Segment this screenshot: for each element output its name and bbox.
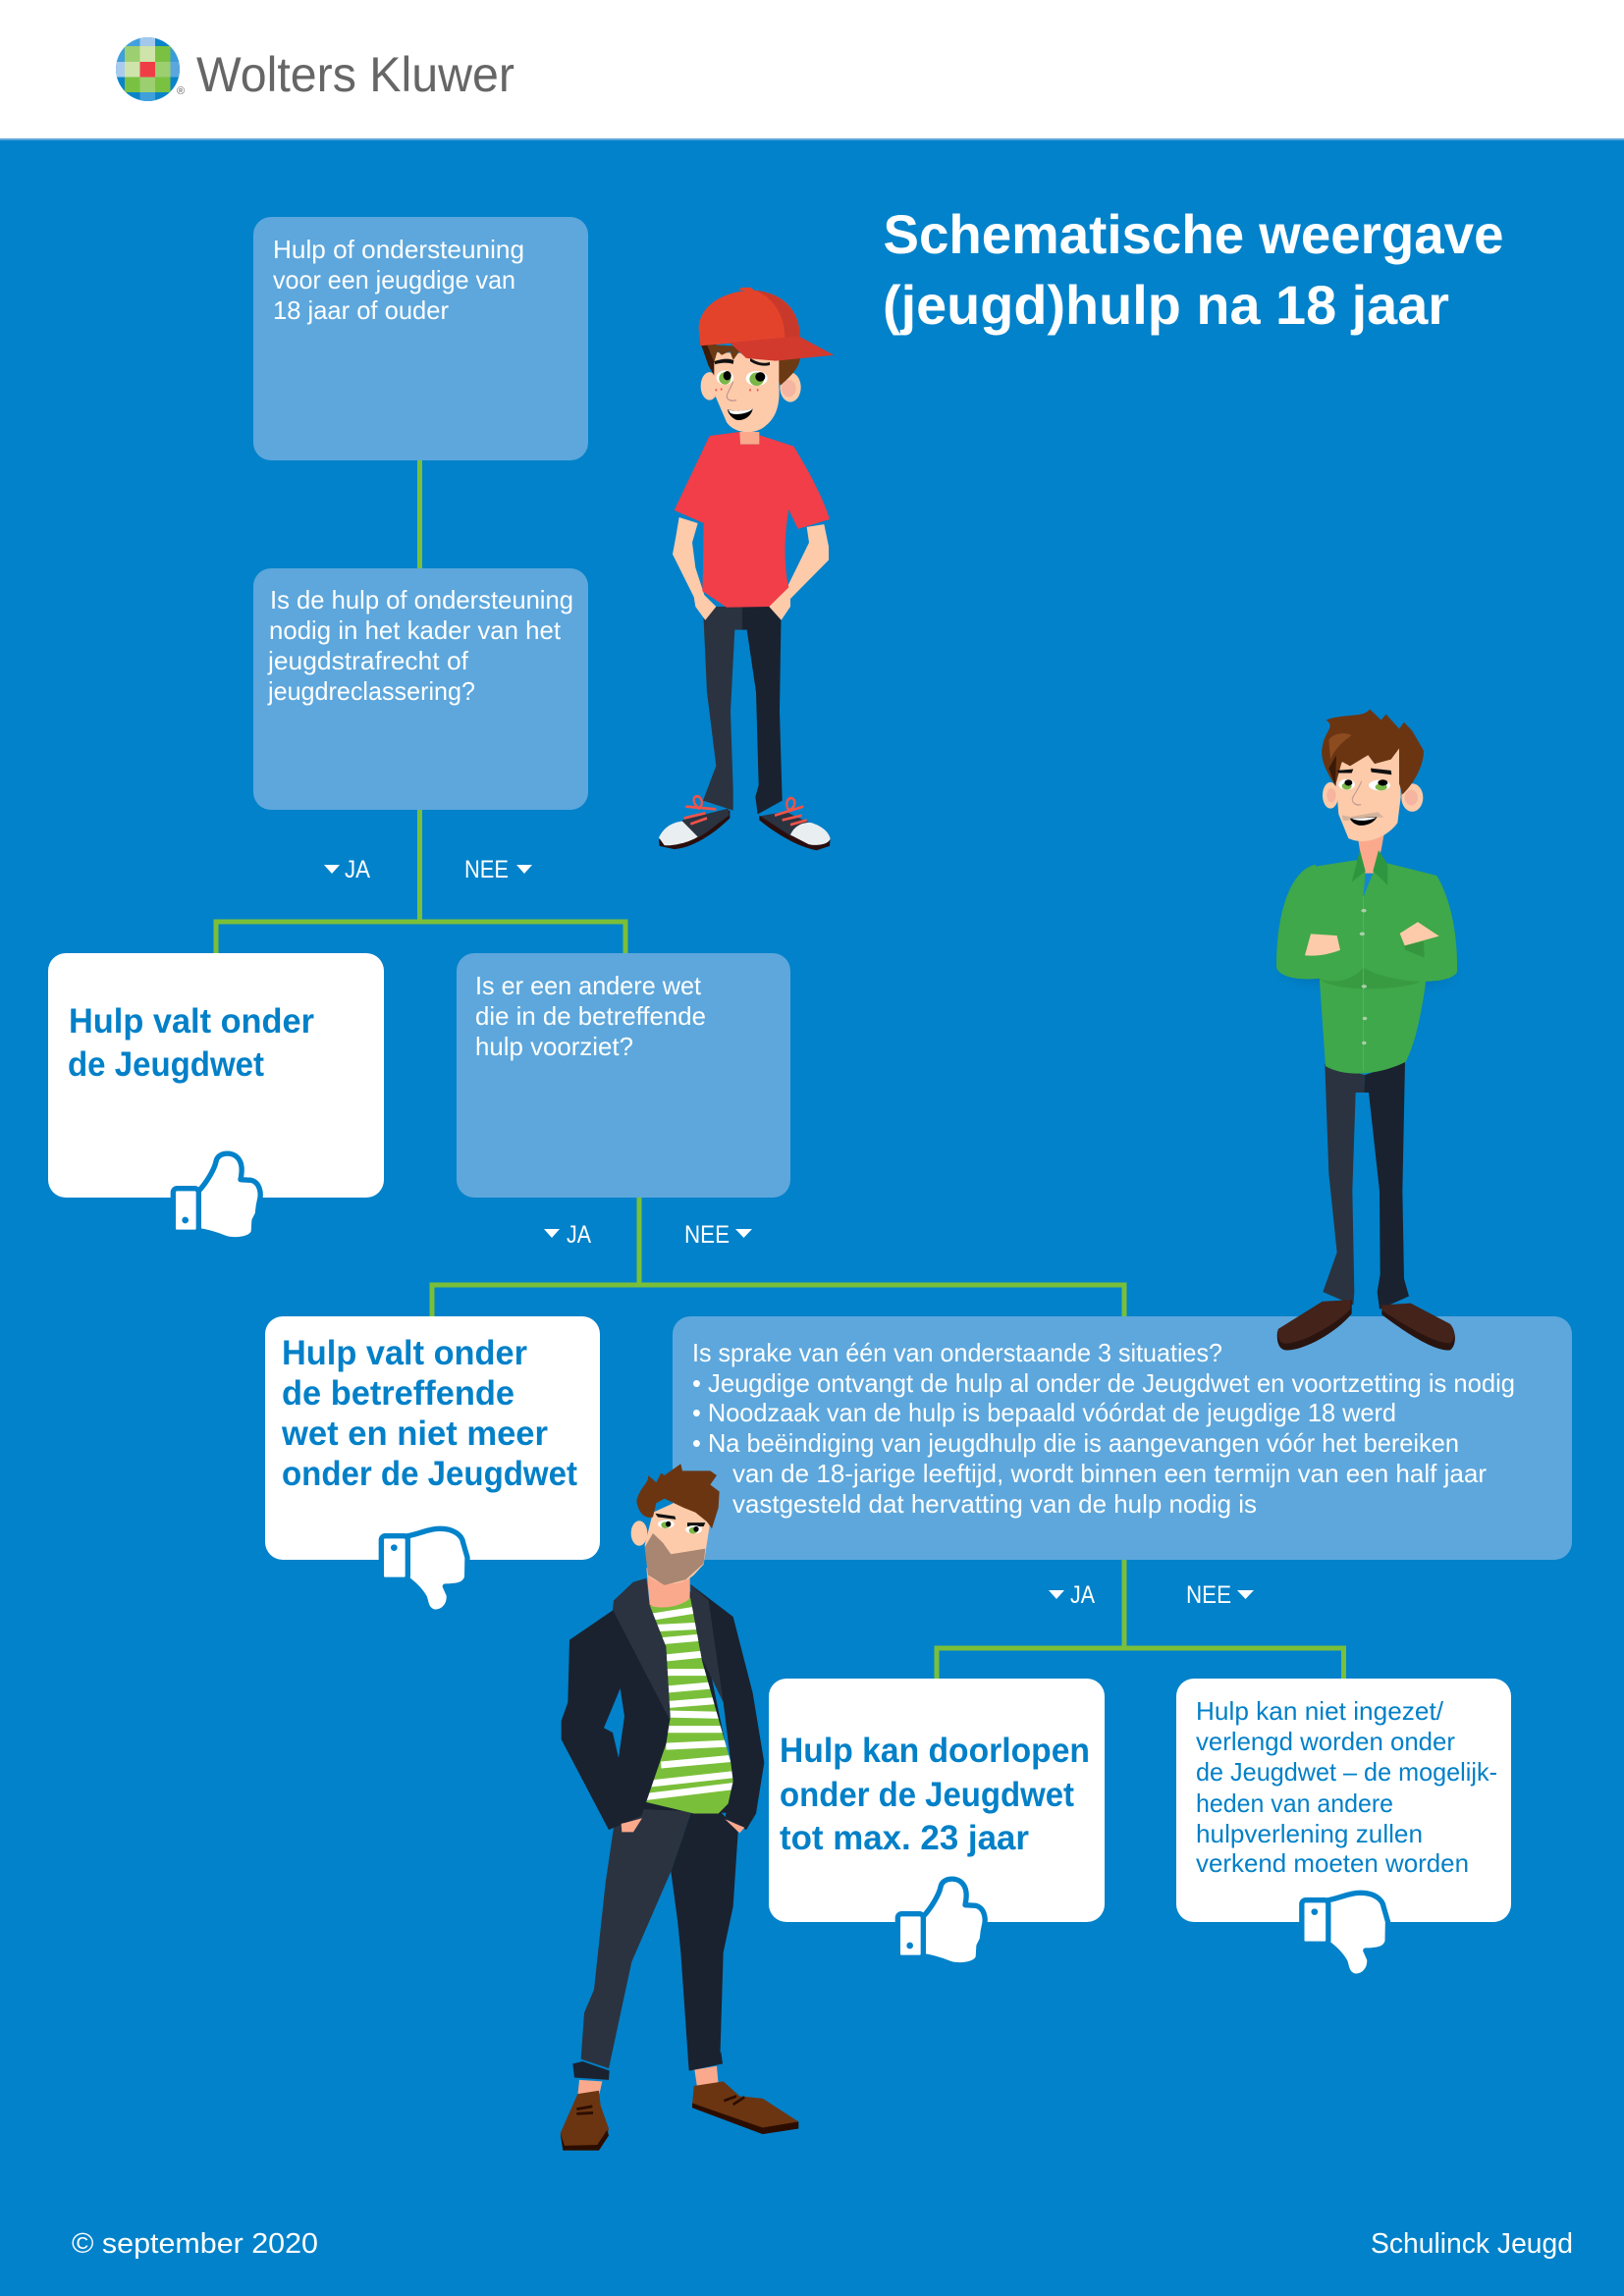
figure: bearded man with jacket [561,1464,798,2151]
panel: hulp kan niet ingezet: hulpverlening zullen [1196,1819,1423,1848]
panel: drie situaties question: • Na beëindiging van jeugdhulp die is aangevangen vóór het bereiken [692,1428,1459,1458]
icon: thumb down [1302,1893,1387,1976]
label: ja / nee 2: JA [567,1221,591,1249]
figure: boy with red cap [659,288,834,850]
figure: man with green shirt [1276,709,1457,1351]
logo: Wolters Kluwer [116,37,514,102]
icon: thumb up [897,1879,985,1965]
title: (jeugd)hulp na 18 jaar [883,274,1449,336]
panel: hulp kan doorlopen: onder de Jeugdwet [780,1776,1074,1814]
panel: hulp kan doorlopen: Hulp kan doorlopen [780,1732,1090,1770]
label: ja / nee 2 [544,1221,752,1249]
panel: jeugdstrafrecht question: nodig in het kader van het [269,615,562,645]
label: ja / nee 1 [324,856,532,883]
panel: hulp kan niet ingezet: verlengd worden onder [1196,1727,1455,1756]
flow connectors [216,460,1343,1679]
icon: thumb up [173,1153,260,1240]
panel: hulp kan niet ingezet: verkend moeten worden [1196,1848,1469,1878]
panel: drie situaties question: vastgesteld dat hervatting van de hulp nodig is [732,1489,1257,1519]
panel: hulp kan doorlopen: tot max. 23 jaar [780,1819,1029,1857]
label: ja / nee 3: NEE [1186,1581,1231,1609]
panel: hulp kan niet ingezet [1176,1679,1511,1922]
footer [72,2228,1573,2260]
panel: hulp kan niet ingezet: heden van andere [1196,1789,1393,1818]
panel: hulp kan doorlopen [769,1679,1105,1922]
logo: Wolters Kluwer: ® [177,85,185,97]
footer: © september 2020 [72,2228,318,2260]
panel: hulp valt onder de Jeugdwet [48,953,384,1198]
panel: start question: Hulp of ondersteuning [273,235,524,264]
panel: andere wet question: Is er een andere wet [475,971,702,1000]
panel: start question: 18 jaar of ouder [273,295,449,325]
panel: hulp kan niet ingezet: de Jeugdwet – de mogelijk- [1196,1757,1497,1787]
panel: hulp valt onder de Jeugdwet: de Jeugdwet [68,1045,264,1084]
panel: drie situaties question: Is sprake van één van onderstaande 3 situaties? [692,1338,1222,1367]
panel: hulp valt onder de Jeugdwet: Hulp valt onder [69,1002,314,1041]
panel: andere wet question [457,953,790,1198]
title: Schematische weergave [884,203,1504,265]
panel: start question [253,217,588,460]
panel: jeugdstrafrecht question [253,568,588,810]
panel: jeugdstrafrecht question: jeugdreclassering? [267,676,475,706]
panel: hulp valt onder betreffende wet: Hulp valt onder [282,1334,527,1372]
panel: drie situaties question: van de 18-jarige leeftijd, wordt binnen een termijn van een half jaar [732,1459,1487,1488]
panel: hulp valt onder betreffende wet: de betreffende [282,1374,514,1413]
label: ja / nee 3: JA [1070,1581,1095,1609]
panel: drie situaties question: • Jeugdige ontvangt de hulp al onder de Jeugdwet en voortzetting is nodig [692,1368,1515,1398]
panel: drie situaties question [673,1316,1572,1560]
logo: Wolters Kluwer: Wolters Kluwer [196,47,514,102]
icon: thumb down [381,1528,467,1612]
label: ja / nee 3 [1049,1581,1254,1609]
panel: jeugdstrafrecht question: jeugdstrafrecht of [267,646,469,675]
label: ja / nee 1: NEE [464,856,509,883]
header band [0,0,1624,140]
title [883,203,1504,336]
panel: start question: voor een jeugdige van [273,265,515,294]
panel: andere wet question: die in de betreffende [475,1001,706,1031]
panel: drie situaties question: • Noodzaak van de hulp is bepaald vóórdat de jeugdige 18 werd [692,1398,1396,1427]
panel: hulp valt onder betreffende wet: onder de Jeugdwet [282,1455,577,1493]
panel: andere wet question: hulp voorziet? [475,1032,633,1061]
panel: hulp kan niet ingezet: Hulp kan niet ingezet/ [1196,1696,1444,1726]
label: ja / nee 1: JA [345,856,370,883]
panel: hulp valt onder betreffende wet: wet en niet meer [281,1415,548,1453]
label: ja / nee 2: NEE [684,1221,730,1249]
panel: hulp valt onder betreffende wet [265,1316,600,1560]
panel: jeugdstrafrecht question: Is de hulp of ondersteuning [270,585,573,614]
footer: Schulinck Jeugd [1371,2228,1573,2260]
